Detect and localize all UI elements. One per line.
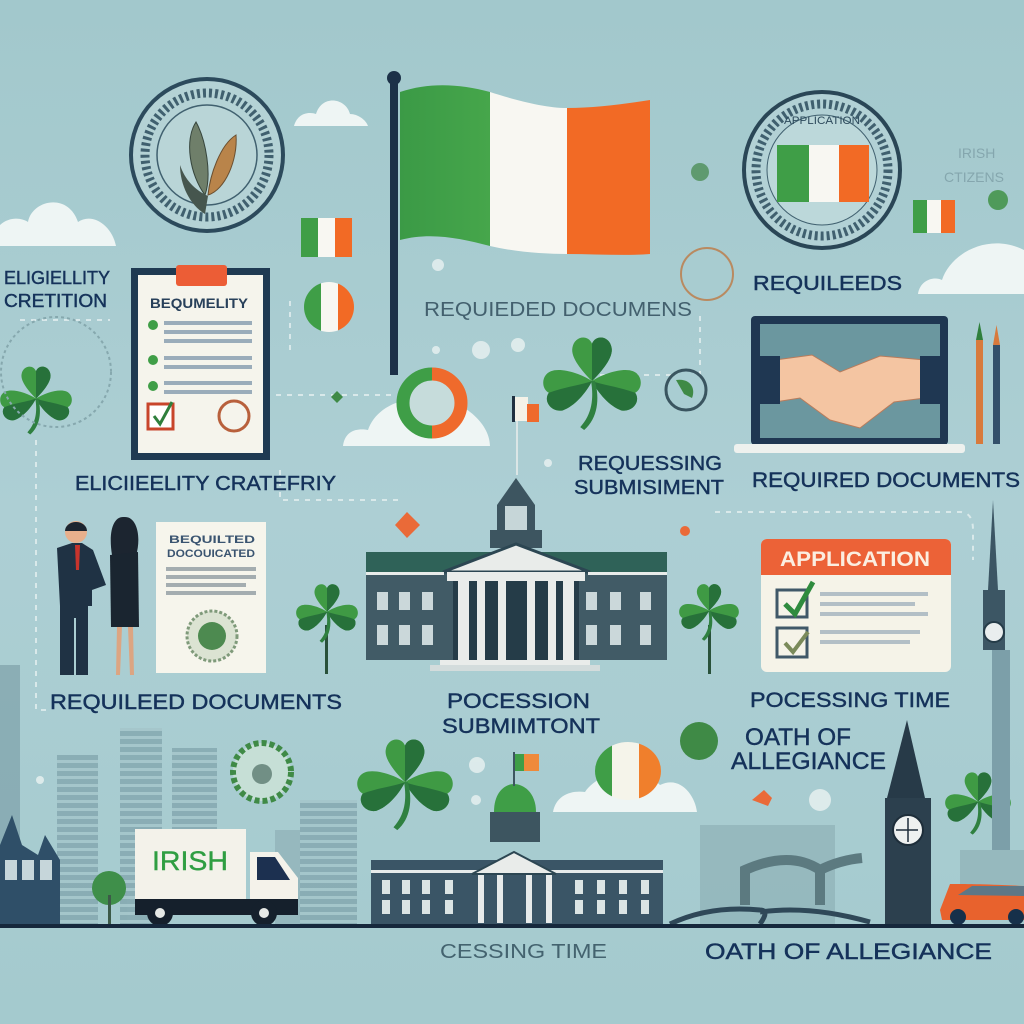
label: requesting submission: REQUESSING — [578, 453, 722, 475]
panel: left seal — [131, 79, 283, 231]
clipboard clip — [176, 265, 227, 286]
ring chart icon — [403, 374, 461, 432]
card lines — [820, 592, 928, 644]
panel: right seal — [744, 92, 900, 248]
flag orange band — [567, 100, 650, 255]
main block — [366, 570, 667, 660]
cupola — [490, 478, 542, 548]
small flag on pole — [512, 396, 539, 475]
orange car — [940, 884, 1024, 925]
label: required documents center: REQUIEDED DOCUMENS — [424, 299, 692, 321]
clock tower — [885, 720, 931, 925]
label: procession submission: POCESSION — [447, 690, 590, 713]
faint label: Irish citizens — [944, 145, 1004, 185]
faint label: Irish citizens: CTIZENS — [944, 169, 1004, 185]
document seal — [187, 611, 237, 661]
clipboard heading: BEQUMELITY — [150, 295, 249, 311]
handshake — [760, 355, 940, 428]
decorative white specks — [36, 259, 831, 811]
woman — [110, 517, 139, 675]
truck label: IRISH — [152, 846, 228, 876]
label: processing time: POCESSING TIME — [750, 689, 950, 712]
windows — [377, 592, 651, 645]
wheels — [147, 900, 277, 926]
clovers — [0, 338, 1011, 835]
label: oath of allegiance: OATH OF — [745, 724, 851, 751]
portico — [430, 544, 600, 671]
lower government building — [371, 752, 663, 924]
label: oath of allegiance bottom: OATH OF ALLEGIANCE — [705, 939, 992, 964]
skyline background — [0, 665, 1024, 925]
label: requesting submission — [574, 453, 724, 499]
flag green band — [400, 85, 490, 246]
document title: DOCOUICATED — [167, 548, 255, 560]
seal text: APPLICATION — [784, 115, 860, 127]
document title — [167, 534, 255, 560]
label: required documents left: REQUILEED DOCUMENTS — [50, 691, 342, 714]
label: processing time bottom: CESSING TIME — [440, 941, 607, 963]
stamp — [219, 401, 249, 431]
document — [156, 522, 266, 673]
small flag top right — [913, 200, 955, 233]
label: procession submission: SUBMIMTONT — [442, 715, 600, 738]
dashed connector lines — [20, 300, 973, 710]
document title: BEQUILTED — [169, 534, 255, 546]
right spire tower — [983, 500, 1010, 850]
flag pole — [387, 71, 401, 375]
label: eligibility criteria left: CRETITION — [4, 291, 107, 311]
seal emblem — [180, 122, 236, 214]
label: requireds: REQUILEEDS — [753, 273, 902, 295]
people and documents — [57, 517, 266, 675]
label: eligibility criteria: ELICIIEELITY CRATEFRIY — [75, 473, 336, 495]
faint badge — [233, 743, 291, 801]
clipboard: eligibility — [131, 265, 270, 460]
label: oath of allegiance: ALLEGIANCE — [731, 748, 886, 775]
label: procession submission — [442, 690, 600, 738]
truck — [135, 829, 298, 926]
tree — [92, 871, 126, 925]
small accent marks — [331, 163, 1008, 806]
label: required documents right: REQUIRED DOCUMENTS — [752, 469, 1020, 492]
laptop handshake — [734, 316, 965, 453]
label: eligibility criteria left — [4, 268, 110, 311]
small round flag — [595, 742, 663, 802]
small flag left — [301, 218, 352, 257]
faint label: Irish citizens: IRISH — [958, 145, 995, 161]
application card — [761, 539, 951, 672]
pencils — [976, 322, 1000, 444]
man — [57, 521, 106, 675]
label: oath of allegiance — [731, 724, 886, 775]
clouds — [0, 100, 1024, 812]
headings — [4, 268, 1020, 964]
ground line — [0, 924, 1024, 928]
round flag badge — [304, 282, 355, 332]
faint circle left — [1, 317, 111, 427]
label: requesting submission: SUBMISIMENT — [574, 477, 724, 499]
ring icon faint — [681, 248, 733, 300]
checklist rows — [164, 321, 252, 394]
label: eligibility criteria left: ELIGIELLITY — [4, 268, 110, 288]
check boxes — [777, 582, 813, 657]
round icon — [666, 370, 706, 410]
card title: APPLICATION — [780, 548, 930, 571]
flag white band — [490, 92, 567, 254]
dome — [490, 752, 540, 842]
check box — [148, 402, 173, 429]
bridge — [670, 858, 870, 924]
clover trees — [296, 584, 739, 674]
panel: flag — [387, 71, 650, 375]
upper government building — [366, 478, 667, 671]
left house — [0, 815, 60, 925]
seal flag — [777, 145, 869, 202]
